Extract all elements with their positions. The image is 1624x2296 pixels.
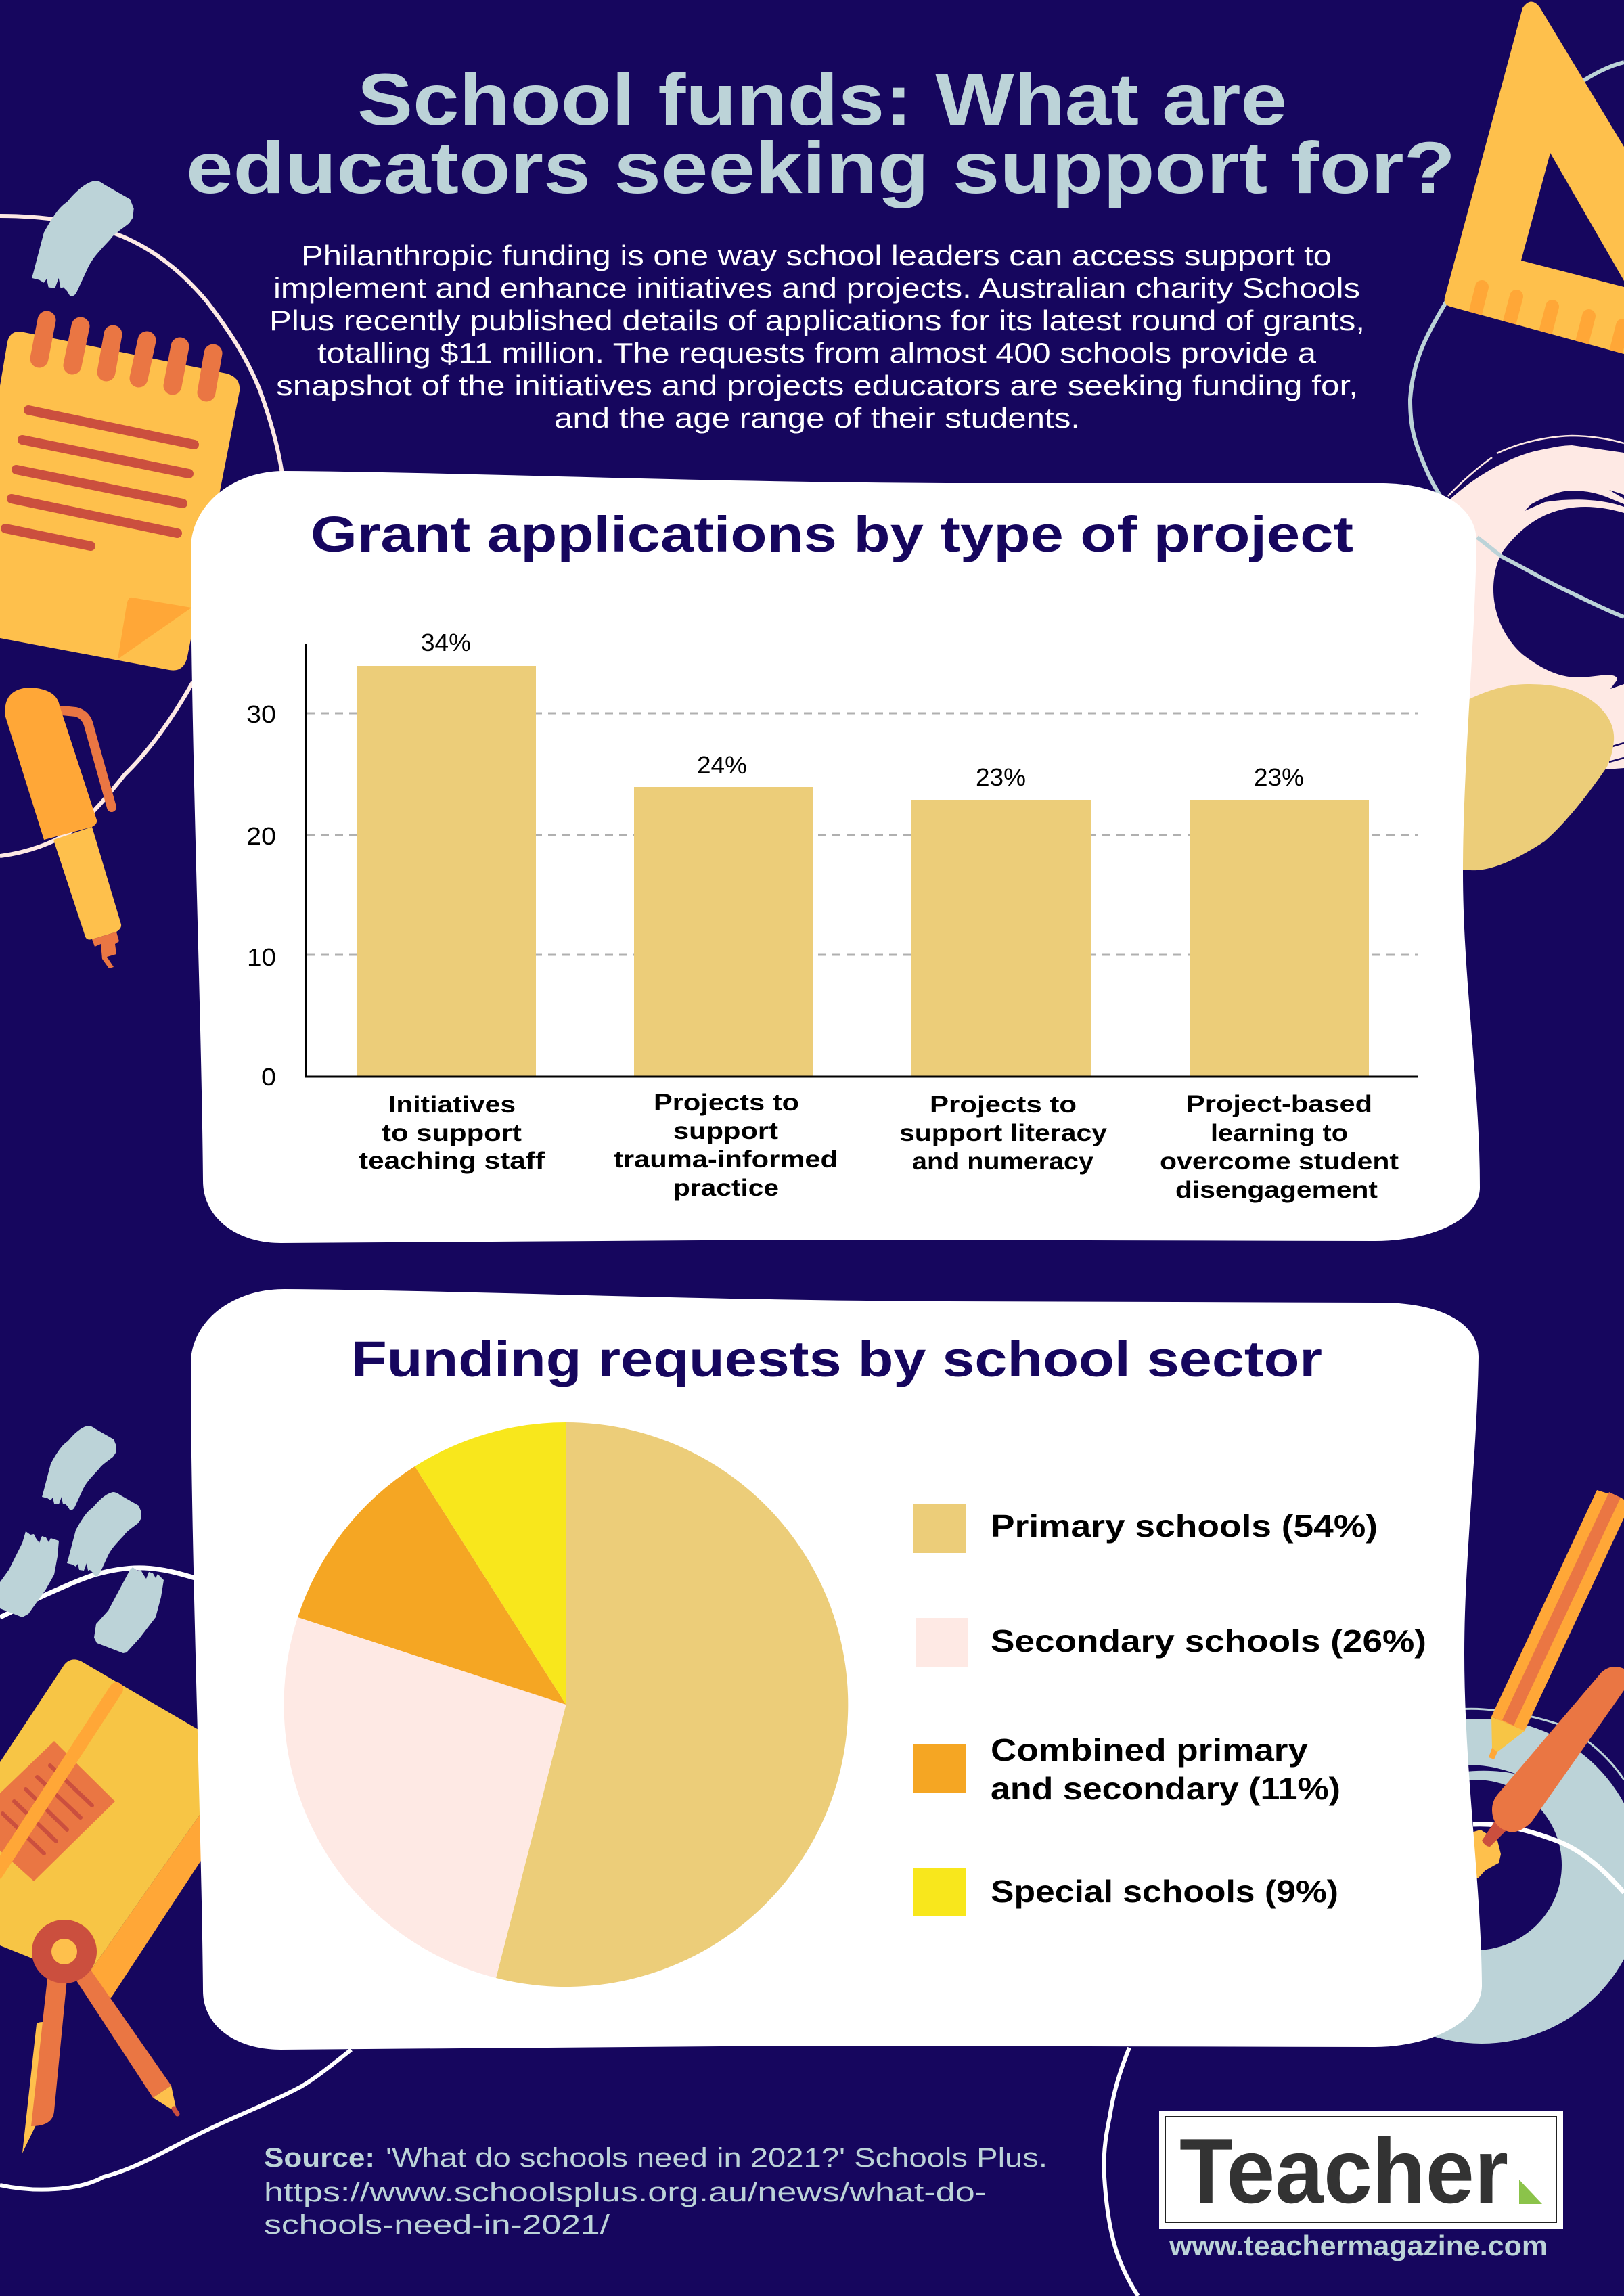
bar chart: Projects to bbox=[930, 1091, 1077, 1118]
legend: Primary schools (54%) bbox=[991, 1508, 1378, 1544]
panel: funding requests by school sector bbox=[191, 1289, 1482, 2050]
bar chart: Project-based bbox=[1186, 1091, 1372, 1117]
icon: brush strokes lower left bbox=[0, 1426, 164, 1653]
bar chart: Initiatives bbox=[388, 1091, 516, 1118]
legend: Secondary schools (26%) bbox=[991, 1623, 1426, 1659]
icon: pen bbox=[5, 688, 121, 968]
intro text bbox=[269, 240, 1365, 434]
pie chart bbox=[284, 1422, 848, 1987]
bar chart bbox=[246, 629, 1418, 1203]
source text bbox=[264, 2143, 1047, 2240]
icon: set square ruler bbox=[1445, 1, 1624, 365]
bar chart: overcome student bbox=[1160, 1148, 1399, 1175]
icon: yellow blob bbox=[1455, 684, 1614, 870]
legend bbox=[914, 1504, 1426, 1916]
icon: blue brush ring bbox=[1319, 1709, 1624, 2044]
bar chart: Projects to bbox=[654, 1089, 799, 1116]
intro text: totalling $11 million. The requests from almost 400 schools provide a bbox=[317, 337, 1317, 369]
bar chart: learning to bbox=[1211, 1120, 1348, 1146]
icon: pencil bbox=[1489, 1490, 1624, 1759]
legend: and secondary (11%) bbox=[991, 1771, 1340, 1806]
bar chart: 20 bbox=[246, 822, 276, 850]
icon: book bbox=[0, 1659, 203, 2007]
source text: https://www.schoolsplus.org.au/news/what-do- bbox=[264, 2178, 987, 2207]
bar chart: disengagement bbox=[1175, 1177, 1378, 1203]
website url: www.teachermagazine.com bbox=[1169, 2230, 1548, 2261]
bar chart: 23% bbox=[976, 763, 1026, 791]
intro text: and the age range of their students. bbox=[554, 402, 1080, 434]
icon: notepad bbox=[0, 320, 240, 671]
bar chart: trauma-informed bbox=[614, 1146, 838, 1173]
source text: 'What do schools need in 2021?' Schools Plus. bbox=[386, 2143, 1047, 2173]
bar chart: and numeracy bbox=[912, 1148, 1094, 1175]
panel: grant applications by type of project bbox=[191, 471, 1480, 1243]
icon: compass bbox=[22, 1920, 177, 2153]
heading: grant applications: Grant applications by type of project bbox=[311, 506, 1353, 562]
title bbox=[186, 58, 1456, 208]
bar chart: 10 bbox=[247, 943, 276, 971]
source text: Source: bbox=[264, 2143, 375, 2173]
heading: funding requests: Funding requests by school sector bbox=[351, 1331, 1322, 1387]
source text: schools-need-in-2021/ bbox=[264, 2210, 610, 2240]
legend: Special schools (9%) bbox=[991, 1874, 1338, 1909]
intro text: snapshot of the initiatives and projects educators are seeking funding for, bbox=[276, 369, 1358, 401]
icon: pink brush ring bbox=[1441, 436, 1624, 778]
intro text: implement and enhance initiatives and projects. Australian charity Schools bbox=[273, 272, 1360, 304]
title: educators seeking support for? bbox=[186, 127, 1456, 208]
title: School funds: What are bbox=[357, 58, 1287, 140]
intro text: Plus recently published details of applications for its latest round of grants, bbox=[269, 305, 1365, 336]
bar chart: support bbox=[673, 1118, 778, 1144]
bar chart: teaching staff bbox=[359, 1148, 545, 1174]
intro text: Philanthropic funding is one way school leaders can access support to bbox=[301, 240, 1332, 271]
icon: brush stroke top left bbox=[32, 181, 134, 296]
bar chart: 0 bbox=[261, 1063, 276, 1091]
bar chart: 34% bbox=[421, 629, 471, 656]
icon: marker with paint bbox=[1455, 1667, 1624, 1881]
legend: Combined primary bbox=[991, 1732, 1308, 1768]
bar chart: 30 bbox=[246, 700, 276, 728]
bar chart: practice bbox=[673, 1175, 779, 1201]
bar chart: 24% bbox=[697, 751, 747, 779]
bar chart: 23% bbox=[1254, 763, 1304, 791]
bar chart: to support bbox=[382, 1120, 522, 1146]
bar chart: support literacy bbox=[899, 1120, 1108, 1146]
logo: Teacher: Teacher bbox=[1179, 2119, 1508, 2222]
